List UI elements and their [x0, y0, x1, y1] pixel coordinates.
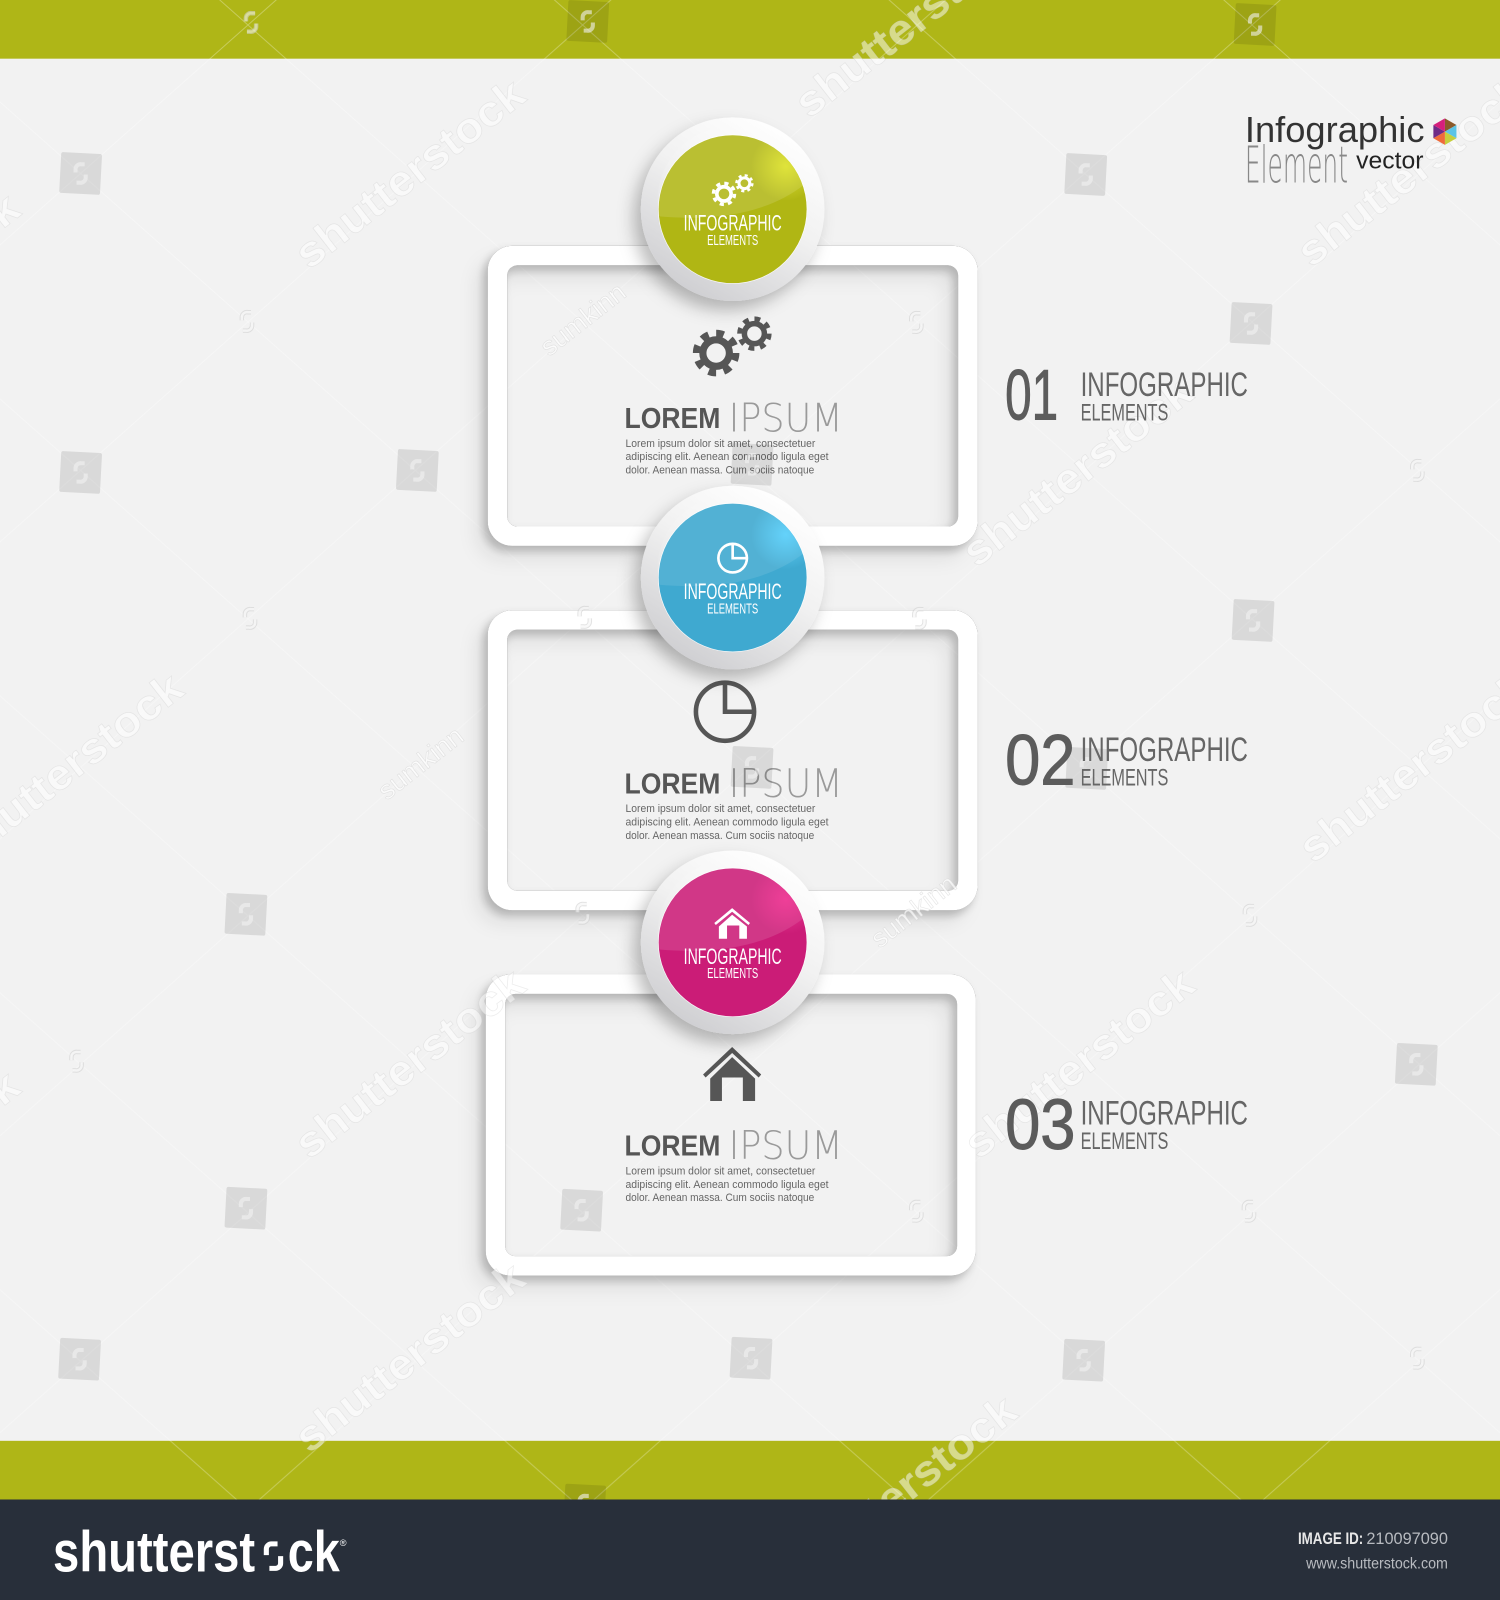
text block 3: dolor. Aenean massa. Cum sociis natoque	[626, 1192, 814, 1204]
footer logo: shutterstock: ck	[288, 1520, 340, 1584]
text block 1	[626, 438, 829, 476]
icon: gears dark	[696, 319, 769, 373]
step label 01: INFOGRAPHIC	[1081, 366, 1248, 404]
panel content 2	[624, 683, 843, 842]
label: infographic elements: ELEMENTS	[707, 233, 758, 249]
text block 3	[626, 1165, 829, 1204]
footer logo: shutterstock: shutterst	[53, 1520, 255, 1584]
heading: lorem ipsum 1	[624, 397, 843, 442]
heading: lorem ipsum 1: IPSUM	[729, 397, 843, 442]
step label 03	[1005, 1085, 1248, 1165]
icon: house white	[714, 908, 750, 939]
text block 2: adipiscing elit. Aenean commodo ligula eget	[626, 817, 829, 829]
icon: pie chart dark	[696, 683, 754, 741]
watermark text: shutterstock	[778, 1386, 1026, 1595]
icon: house dark	[703, 1047, 761, 1101]
label: infographic elements: INFOGRAPHIC	[684, 944, 782, 969]
step label 01	[1005, 355, 1248, 435]
footer logo: shutterstock: ®	[340, 1538, 347, 1548]
step label 02: ELEMENTS	[1081, 765, 1168, 792]
footer image id: 210097090	[1366, 1530, 1448, 1548]
footer image id: IMAGE ID:	[1298, 1530, 1363, 1548]
step label 01: ELEMENTS	[1081, 399, 1168, 426]
step label 03: INFOGRAPHIC	[1081, 1094, 1248, 1132]
text block 1: adipiscing elit. Aenean commodo ligula eget	[626, 451, 829, 463]
title: infographic element vector: Element	[1245, 137, 1348, 196]
step label 03: ELEMENTS	[1081, 1128, 1168, 1155]
watermark text: shutterstock	[955, 959, 1204, 1168]
heading: lorem ipsum 3	[624, 1124, 843, 1169]
panel: frame 2	[488, 610, 978, 910]
watermark text: shutterstock	[953, 367, 1202, 576]
text block 2: dolor. Aenean massa. Cum sociis natoque	[626, 830, 814, 842]
label: infographic elements: INFOGRAPHIC	[684, 579, 782, 604]
icon: colored hexagon	[1433, 118, 1456, 145]
button: green circle	[641, 117, 824, 301]
watermark text: shutterstock	[286, 69, 534, 278]
label: infographic elements	[684, 211, 782, 249]
button: pink circle	[641, 851, 824, 1034]
panel content 3	[624, 1047, 843, 1204]
label: infographic elements	[684, 944, 782, 982]
panel: frame 3	[486, 974, 976, 1276]
title: infographic element vector: vector	[1356, 147, 1423, 174]
footer bar	[0, 1499, 1500, 1600]
watermark text: sumkinn	[865, 869, 962, 954]
icon: pie chart white	[718, 544, 747, 572]
heading: lorem ipsum 3: IPSUM	[729, 1124, 843, 1169]
panel content 1	[624, 319, 843, 476]
heading: lorem ipsum 3: LOREM	[624, 1131, 720, 1163]
heading: lorem ipsum 2: LOREM	[624, 768, 720, 800]
top green band	[0, 0, 1500, 59]
heading: lorem ipsum 2	[624, 762, 843, 807]
watermark text: shutterstock	[286, 1253, 534, 1462]
footer image id	[1298, 1530, 1448, 1572]
button: blue circle	[641, 486, 824, 669]
bottom green band	[0, 1441, 1500, 1500]
label: infographic elements: ELEMENTS	[707, 966, 758, 982]
step label 03: 03	[1005, 1085, 1076, 1165]
label: infographic elements	[684, 579, 782, 617]
text block 2	[626, 803, 829, 842]
text block 1: Lorem ipsum dolor sit amet, consectetuer	[626, 438, 816, 450]
step label 02: 02	[1005, 721, 1076, 801]
footer image id: www.shutterstock.com	[1305, 1555, 1448, 1572]
step label 01: 01	[1005, 355, 1058, 435]
step label 02: INFOGRAPHIC	[1081, 731, 1248, 769]
heading: lorem ipsum 1: LOREM	[624, 403, 720, 435]
title: infographic element vector	[1245, 110, 1424, 196]
text block 3: Lorem ipsum dolor sit amet, consectetuer	[626, 1165, 816, 1177]
text block 3: adipiscing elit. Aenean commodo ligula eget	[626, 1179, 829, 1191]
watermark text: shutterstock	[286, 959, 534, 1168]
panel: frame 1	[488, 246, 978, 546]
label: infographic elements: INFOGRAPHIC	[684, 211, 782, 236]
watermark text: sumkinn	[372, 721, 469, 806]
label: infographic elements: ELEMENTS	[707, 601, 758, 617]
step label 02	[1005, 721, 1248, 801]
watermark text: sumkinn	[534, 277, 631, 362]
icon: gears white	[713, 175, 752, 204]
text block 1: dolor. Aenean massa. Cum sociis natoque	[626, 464, 814, 476]
title: infographic element vector: Infographic	[1245, 110, 1424, 150]
heading: lorem ipsum 2: IPSUM	[729, 762, 843, 807]
text block 2: Lorem ipsum dolor sit amet, consectetuer	[626, 803, 816, 815]
